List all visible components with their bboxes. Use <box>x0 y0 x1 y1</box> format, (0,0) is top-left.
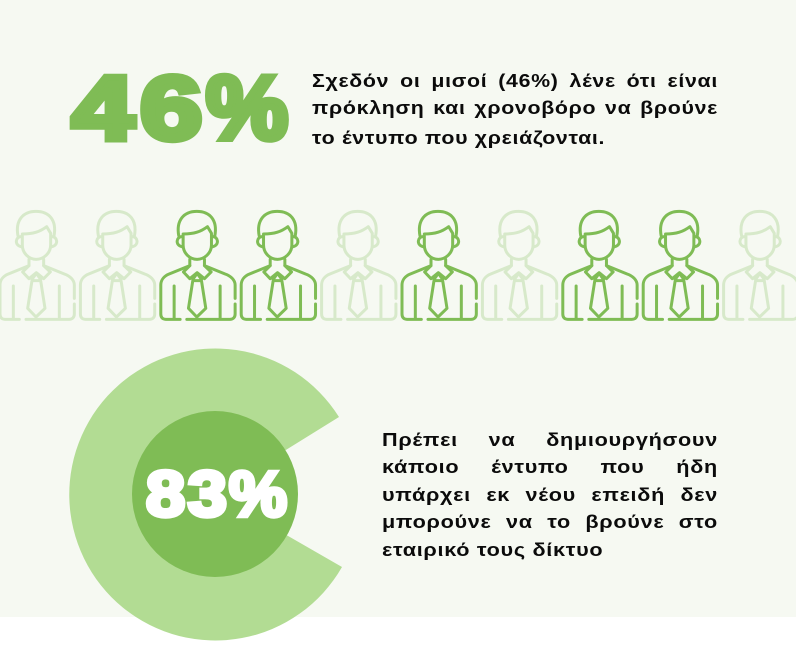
inner circle <box>132 411 298 577</box>
text block: 46% description: Σχεδόν οι μισοί (46%) λένε ότι είναι <box>312 70 718 90</box>
person 8 <box>563 211 637 319</box>
person 7 <box>482 211 557 319</box>
person 6 <box>402 211 476 319</box>
text block: 46% description <box>312 70 718 148</box>
text block: 83% description: μπορούνε να το βρούνε στο <box>382 511 718 532</box>
text block: 83% description: κάποιο έντυπο που ήδη <box>382 456 718 477</box>
donut value: 83%: % <box>229 458 287 530</box>
text block: 46% description: πρόκληση και χρονοβόρο να βρούνε <box>312 97 718 118</box>
text block: 83% description: Πρέπει να δημιουργήσουν <box>382 428 718 450</box>
text block: 83% description <box>382 428 718 560</box>
donut value: 83% <box>146 458 287 530</box>
text block: 83% description: εταιρικό τους δίκτυο <box>382 539 603 560</box>
outer ring segment <box>69 349 342 641</box>
donut chart: 83% <box>69 349 342 641</box>
person 4 <box>241 211 316 319</box>
row of ten people, 46% highlighted <box>0 211 796 319</box>
big figure: 46% <box>72 58 288 159</box>
text block: 83% description: υπάρχει εκ νέου επειδή δεν <box>382 484 718 505</box>
person 1 <box>0 211 74 319</box>
person 10 <box>724 211 796 319</box>
person 9 <box>643 211 718 319</box>
donut value: 83%: 83 <box>146 459 227 530</box>
person 5 <box>322 211 396 319</box>
person 3 <box>161 211 235 319</box>
big figure: 46%: 46 <box>72 58 202 159</box>
big figure: 46%: % <box>206 59 288 159</box>
text block: 46% description: το έντυπο που χρειάζονται. <box>312 127 605 148</box>
person 2 <box>80 211 155 319</box>
